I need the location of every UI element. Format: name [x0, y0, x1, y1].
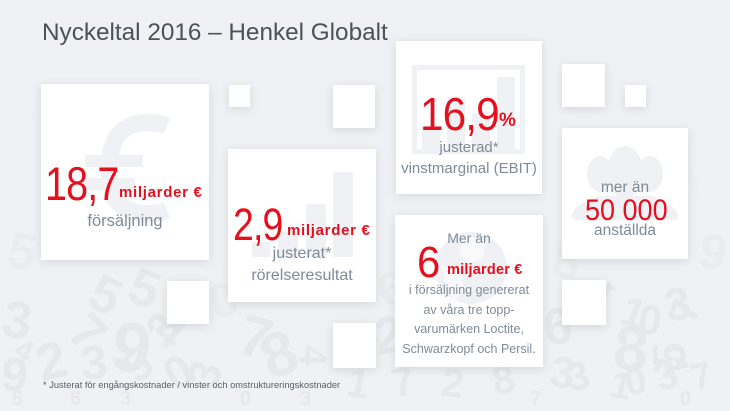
background pattern of scattered digits: 7 — [661, 294, 709, 327]
decorative square — [229, 85, 250, 107]
description: top brands: i försäljning genererat — [409, 283, 529, 297]
background pattern of scattered digits: 0 — [634, 295, 666, 345]
background pattern of scattered digits: 8 — [166, 16, 214, 67]
background pattern of scattered digits: 0 — [666, 155, 710, 208]
background pattern of scattered digits: 5 — [80, 263, 131, 328]
value: operating profit: 2,9 — [233, 199, 282, 250]
panel: EBIT margin — [396, 41, 542, 194]
description: top brands: av våra tre topp- — [423, 303, 514, 317]
panel: operating profit — [228, 149, 376, 302]
unit: top brands: miljarder € — [447, 262, 523, 278]
value: top brands: 6 — [417, 238, 440, 287]
decorative square — [333, 323, 376, 368]
unit: operating profit: miljarder € — [287, 222, 371, 239]
background pattern of scattered digits: 5 — [12, 388, 23, 410]
label: EBIT margin — [401, 139, 537, 177]
background pattern of scattered digits: 4 — [291, 345, 333, 366]
background pattern of scattered digits: 2 — [654, 21, 702, 72]
background pattern of scattered digits: 0 — [240, 388, 251, 410]
background pattern of scattered digits: 3 — [120, 388, 131, 410]
description: top brands — [402, 283, 536, 356]
background pattern of scattered digits: 6 — [370, 258, 415, 320]
panel: employees — [562, 128, 688, 259]
background pattern of scattered digits: 3 — [661, 276, 695, 332]
background pattern of scattered digits: 3 — [648, 352, 684, 400]
icon: people — [572, 146, 678, 220]
background pattern of scattered digits: 8 — [611, 313, 651, 385]
background pattern of scattered digits: 9 — [105, 306, 157, 390]
description: top brands: Schwarzkopf och Persil. — [402, 342, 536, 356]
background pattern of scattered digits: 0 — [621, 359, 651, 405]
background pattern of scattered digits: 7 — [530, 388, 541, 410]
background pattern of scattered digits: 2 — [370, 305, 409, 367]
icon: bar chart — [252, 172, 353, 257]
footnote: * Justerat för engångskostnader / vinster och omstruktureringskostnader — [43, 380, 340, 390]
background pattern of scattered digits: 1 — [343, 361, 373, 408]
panel: top brands — [395, 215, 543, 367]
value: employees: 50 000 — [585, 194, 668, 227]
background pattern of scattered digits: 6 — [541, 297, 575, 357]
title: Nyckeltal 2016 – Henkel Globalt — [42, 19, 388, 46]
background pattern of scattered digits: 7 — [388, 358, 419, 406]
decorative square — [562, 280, 606, 325]
unit: EBIT margin: % — [499, 110, 516, 131]
background pattern of scattered digits: 6 — [76, 7, 119, 59]
background pattern of scattered digits: 3 — [300, 388, 311, 410]
background pattern of scattered digits: 8 — [489, 357, 518, 404]
icon: euro — [85, 114, 170, 222]
description: top brands: varumärken Loctite, — [414, 322, 524, 336]
background pattern of scattered digits: 4 — [654, 350, 696, 378]
background pattern of scattered digits: 4 — [586, 275, 622, 302]
background pattern of scattered digits: 5 — [643, 342, 695, 368]
decorative square — [562, 64, 605, 107]
background pattern of scattered digits: 6 — [70, 388, 81, 410]
label: operating profit: rörelseresultat — [251, 267, 353, 284]
background pattern of scattered digits: 8 — [548, 231, 585, 291]
background pattern of scattered digits: 7 — [1, 97, 44, 149]
background pattern of scattered digits: 5 — [121, 257, 168, 321]
background pattern of scattered digits: 5 — [3, 221, 42, 282]
background pattern of scattered digits: 3 — [563, 353, 594, 401]
background pattern of scattered digits: 4 — [8, 332, 40, 370]
label: more than: Mer än — [447, 230, 491, 246]
label: more than: mer än — [601, 179, 649, 196]
label: operating profit: justerat* — [273, 245, 331, 262]
label: EBIT margin: justerad* — [439, 139, 499, 156]
background pattern of scattered digits: 4 — [144, 303, 197, 359]
background pattern of scattered digits: 1 — [606, 364, 636, 409]
background pattern of scattered digits: 3 — [136, 304, 191, 350]
icon: globe — [436, 232, 507, 304]
background pattern of scattered digits: 3 — [234, 96, 275, 148]
background pattern of scattered digits: 4 — [687, 84, 726, 137]
background pattern of scattered digits: 3 — [176, 354, 233, 395]
background pattern of scattered digits: 7 — [57, 302, 118, 364]
background pattern of scattered digits: 3 — [546, 347, 579, 399]
background pattern of scattered digits: 0 — [203, 269, 245, 331]
decorative square — [333, 85, 375, 128]
icon: framed bar chart — [412, 65, 525, 154]
value: sales: 18,7 — [45, 157, 118, 210]
background pattern of scattered digits: 8 — [251, 317, 307, 393]
label: EBIT margin: vinstmarginal (EBIT) — [401, 160, 537, 177]
decorative square — [167, 281, 209, 324]
background pattern of scattered digits: 0 — [680, 388, 691, 410]
unit: sales: miljarder € — [119, 184, 203, 201]
background pattern of scattered digits: 2 — [30, 330, 73, 394]
background pattern of scattered digits: 1 — [615, 286, 653, 338]
background pattern of scattered digits: 7 — [686, 353, 716, 398]
value: EBIT margin: 16,9 — [420, 88, 499, 140]
background pattern of scattered digits: 3 — [78, 336, 110, 391]
background pattern of scattered digits: 2 — [439, 360, 467, 407]
background pattern of scattered digits: 5 — [113, 339, 163, 393]
background pattern of scattered digits: 0 — [154, 343, 202, 401]
panel: sales — [41, 84, 209, 260]
background pattern of scattered digits: 7 — [232, 302, 280, 373]
background pattern of scattered digits: 5 — [297, 34, 335, 86]
label: operating profit — [251, 245, 353, 284]
label: sales: försäljning — [87, 212, 163, 230]
label: employees: anställda — [594, 222, 656, 239]
decorative square — [625, 85, 646, 107]
